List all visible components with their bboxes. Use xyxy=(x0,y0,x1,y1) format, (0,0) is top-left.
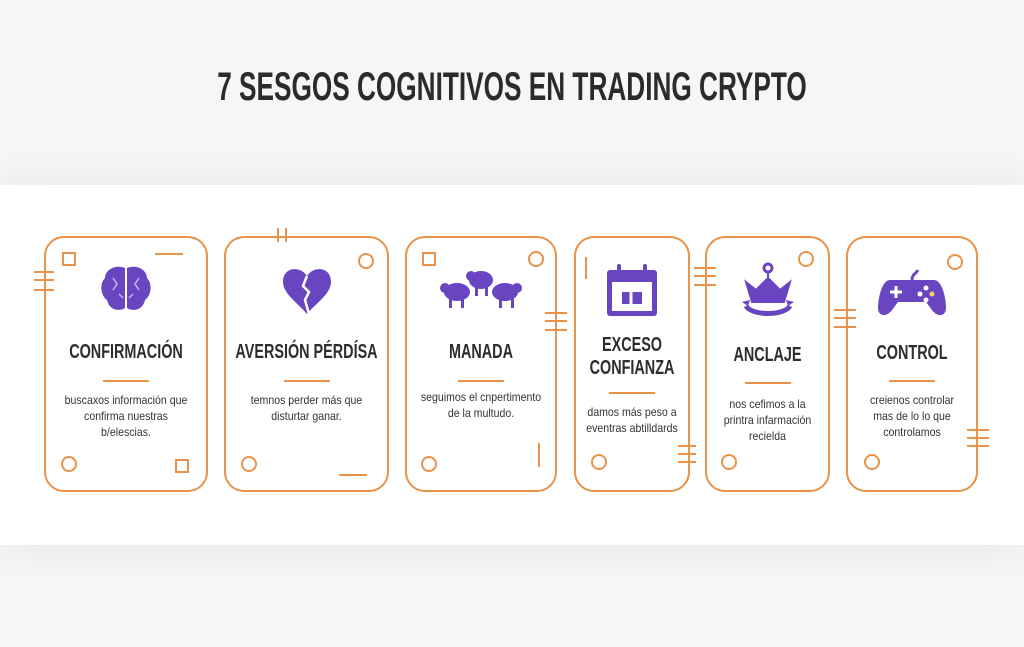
text: nos cefimos a la printra infarmación recielda xyxy=(724,397,811,443)
heading: CONFIRMACIÓN xyxy=(69,341,183,363)
card 6 xyxy=(846,236,978,492)
card 2 xyxy=(224,236,389,492)
icon: sheep xyxy=(440,271,522,308)
heading: MANADA xyxy=(449,341,513,363)
card 1 xyxy=(44,236,208,492)
text: temnos perder más que disturtar ganar. xyxy=(251,393,362,423)
text: buscaxos información que confirma nuestras b/elescias. xyxy=(65,393,187,439)
icon: calendar xyxy=(607,264,657,316)
text: seguimos el cnpertimento xyxy=(421,390,541,404)
heading xyxy=(590,334,674,379)
heading: CONTROL xyxy=(876,342,948,364)
card 3 xyxy=(405,236,557,492)
heading: EXCESO xyxy=(602,334,662,356)
text: damos más peso a eventras abtilldards xyxy=(586,405,678,435)
heading: CONFIANZA xyxy=(590,357,674,379)
text: creienos controlar mas de lo lo que controlamos xyxy=(870,393,954,439)
text: de la multudo. xyxy=(448,406,514,420)
heading: AVERSIÓN PÉRDÍSA xyxy=(235,341,378,363)
text xyxy=(421,390,541,420)
background panel xyxy=(0,185,1024,545)
card 5 xyxy=(705,236,830,492)
icon: gamepad xyxy=(878,269,946,316)
icon: anchor crown xyxy=(742,262,794,316)
card 4 xyxy=(574,236,690,492)
heading: ANCLAJE xyxy=(733,344,801,366)
icon: broken heart xyxy=(283,269,331,314)
title: 7 SESGOS COGNITIVOS EN TRADING CRYPTO xyxy=(217,65,807,109)
icon: brain xyxy=(101,266,151,310)
